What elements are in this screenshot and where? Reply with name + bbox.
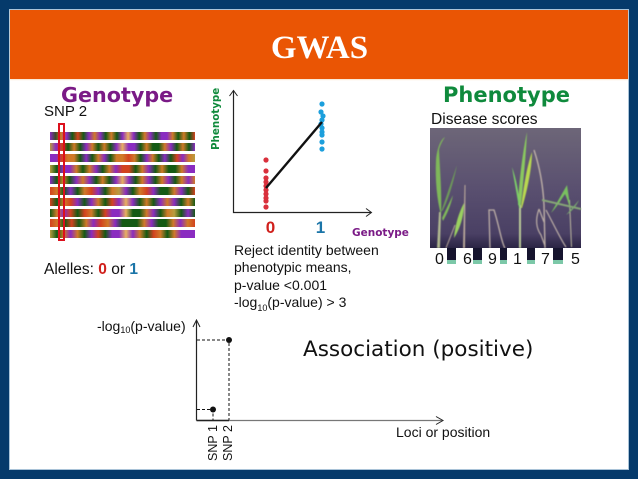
SNP 1 label: SNP 1 [206, 425, 220, 461]
genotype 0 points [263, 157, 269, 210]
y axis label: -log [97, 318, 120, 334]
y axis label: Phenotype [210, 88, 222, 150]
seedling score 1 [512, 132, 532, 248]
reject identity text: p-value <0.001 [234, 277, 327, 293]
reject identity text: Reject identity between [234, 242, 379, 258]
reject identity text [234, 242, 379, 313]
SNP 2 marker [197, 337, 232, 420]
disease score values: 5 [571, 251, 580, 268]
phenotype heading: Phenotype [443, 83, 570, 107]
alleles legend: Alelles: 0 or 1 [44, 261, 138, 278]
seedling score 6 [446, 185, 466, 248]
disease score values [435, 251, 580, 268]
y axis label: (p-value) [130, 318, 186, 334]
disease score values: 0 [435, 251, 444, 268]
genotype heading: Genotype [61, 83, 173, 107]
dried score 9 [489, 210, 505, 248]
axes [230, 90, 372, 216]
disease score values: 1 [513, 251, 522, 268]
dried score 7 [534, 150, 566, 248]
disease score values: 9 [488, 251, 497, 268]
regression line [266, 122, 322, 188]
reject identity text: -log10(p-value) > 3 [234, 294, 346, 313]
y axis label: 10 [120, 325, 130, 335]
disease score values: 6 [463, 251, 472, 268]
SNP 2 label: SNP 2 [44, 103, 87, 120]
association heading: Association (positive) [303, 337, 533, 362]
SNP 2 highlight box [58, 123, 65, 241]
disease score values: 7 [541, 251, 550, 268]
title: GWAS [271, 30, 368, 66]
genotype 1 points [318, 101, 326, 152]
reject identity text: phenotypic means, [234, 259, 352, 275]
seedling score 0 [436, 137, 457, 248]
SNP 1 marker [197, 406, 216, 420]
label strip [430, 248, 581, 264]
x axis label: Loci or position [396, 424, 490, 440]
seedling score 5 [542, 185, 581, 247]
plant photo [430, 128, 582, 264]
SNP 2 label: SNP 2 [221, 425, 235, 461]
axis value 0: 0 [266, 218, 275, 237]
title banner [10, 10, 628, 79]
plot axes [193, 320, 443, 424]
panel: genotype [44, 83, 173, 278]
panel: phenotype [430, 83, 582, 268]
genotype haplotype bars [50, 132, 195, 238]
axis value 1: 1 [316, 218, 325, 237]
plants [436, 132, 581, 248]
disease scores label: Disease scores [431, 111, 538, 128]
x axis label: Genotype [352, 227, 409, 239]
